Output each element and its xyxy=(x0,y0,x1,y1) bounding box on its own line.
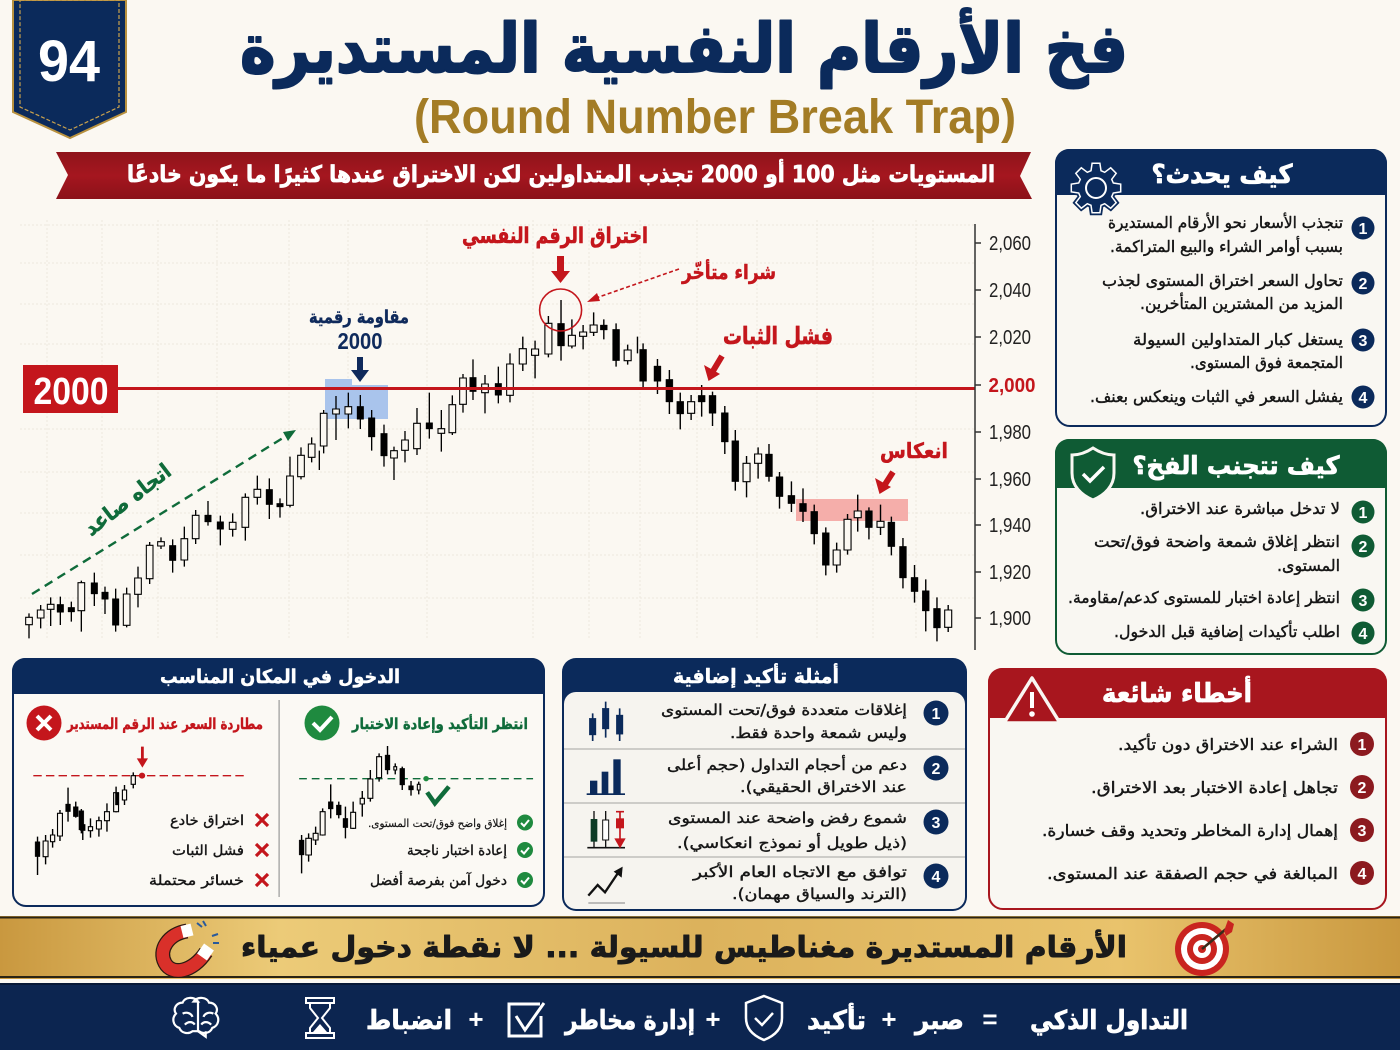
heading: أخطاء شائعة xyxy=(1102,676,1252,709)
panel: additional confirmation examples xyxy=(562,658,967,911)
price axis: 2,020 xyxy=(989,327,1031,349)
heading: أمثلة تأكيد إضافية xyxy=(673,662,839,688)
badge: number 94 xyxy=(13,0,126,138)
ribbon banner: المستويات مثل 100 أو 2000 تجذب المتداولين لكن الاختراق عندها كثيرًا ما يكون خادعًا xyxy=(127,158,995,188)
icon: red x xyxy=(26,706,62,740)
number badges xyxy=(1352,216,1374,408)
text: confirmation: تأكيد xyxy=(807,1003,866,1036)
number badges: 4 xyxy=(1359,390,1368,407)
heading: الدخول في المكان المناسب xyxy=(160,666,400,688)
header xyxy=(988,668,1387,718)
price axis: 1,960 xyxy=(989,469,1031,491)
arrow: reversal xyxy=(875,472,893,494)
label: psychological number breakout: اختراق الرقم النفسي xyxy=(462,224,648,249)
number badges xyxy=(1352,500,1374,644)
number badges xyxy=(1350,732,1374,885)
number badges: 1 xyxy=(1359,505,1368,522)
title: فخ الأرقام النفسية المستديرة xyxy=(240,7,1128,89)
arrow: to breakout xyxy=(551,256,570,283)
number badges: 3 xyxy=(1359,593,1368,610)
heading: chasing price: مطاردة السعر عند الرقم المستدير xyxy=(66,715,263,733)
text block xyxy=(661,701,907,903)
body xyxy=(564,692,965,909)
price axis: 1,900 xyxy=(989,608,1031,630)
text block: المتجمعة فوق المستوى. xyxy=(1190,353,1343,373)
number badges: 4 xyxy=(1358,866,1367,883)
header xyxy=(1055,149,1387,195)
footer: smart trading equation xyxy=(0,984,1400,1050)
panel: how to avoid the trap xyxy=(1055,439,1387,654)
number badges: 3 xyxy=(932,815,941,832)
text block: اطلب تأكيدات إضافية قبل الدخول. xyxy=(1114,620,1340,642)
panel: common mistakes xyxy=(988,668,1387,909)
mini chart: confirmation xyxy=(299,746,533,873)
checklist icons xyxy=(517,814,533,888)
label: numeric resistance xyxy=(309,307,409,354)
number badges: 1 xyxy=(932,706,941,723)
icon: warning xyxy=(1004,678,1060,723)
text block: المستوى. xyxy=(1277,556,1340,576)
checklist text: إعادة اختبار ناجحة xyxy=(407,843,507,859)
text block: تحاول السعر اختراق المستوى لجذب xyxy=(1102,271,1343,291)
heading: كيف يحدث؟ xyxy=(1152,160,1293,190)
icon: shield check xyxy=(1072,448,1114,500)
text: discipline: انضباط xyxy=(366,1006,452,1036)
label: 2000 box: 2000 xyxy=(34,371,108,413)
text block: توافق مع الاتجاه العام الأكبر xyxy=(692,862,907,881)
header xyxy=(12,658,545,694)
price axis: 2,040 xyxy=(989,280,1031,302)
icon: checkbox xyxy=(509,1003,544,1036)
arrow: to resistance xyxy=(351,357,369,382)
x-list text xyxy=(149,813,244,889)
text block: إهمال إدارة المخاطر وتحديد وقف خسارة. xyxy=(1042,821,1338,841)
panel: how it happens xyxy=(1055,149,1387,426)
text block: لا تدخل مباشرة عند الاختراق. xyxy=(1140,499,1340,519)
text: smart trading: التداول الذكي xyxy=(1030,1006,1188,1036)
text block: دعم من أحجام التداول (حجم أعلى xyxy=(667,755,907,774)
text block: عند الاختراق الحقيقي). xyxy=(740,778,907,797)
number badges: 4 xyxy=(932,869,941,886)
text: الأرقام المستديرة مغناطيس للسيولة ... لا نقطة دخول عمياء xyxy=(241,929,1127,964)
x-list text: اختراق خادع xyxy=(170,813,244,829)
text: risk management: إدارة مخاطر xyxy=(563,1006,695,1036)
arrow: uptrend dashed xyxy=(32,430,296,594)
text: plus: + xyxy=(705,1004,721,1034)
price axis: 1,920 xyxy=(989,562,1031,584)
line: 2000 level xyxy=(117,387,975,390)
icon: green check xyxy=(304,706,340,740)
checklist text: إغلاق واضح فوق/تحت المستوى. xyxy=(368,817,507,830)
heading: كيف تتجنب الفخ؟ xyxy=(1132,451,1340,481)
text block: المزيد من المشترين المتأخرين. xyxy=(1140,292,1343,314)
icon: target xyxy=(1175,920,1234,976)
label: uptrend: اتجاه صاعد xyxy=(79,459,176,541)
x-list text: فشل الثبات xyxy=(172,843,244,859)
icons xyxy=(587,702,626,903)
ribbon banner xyxy=(56,152,1032,199)
number badges: 2 xyxy=(1359,276,1368,293)
price axis: 2,000 xyxy=(988,375,1036,397)
text block: (الترند والسياق مهمان). xyxy=(732,885,907,903)
label: reversal: انعكاس xyxy=(880,439,948,463)
price axis: 2,060 xyxy=(989,233,1031,255)
number badges: 2 xyxy=(1359,539,1368,556)
mini chart: chasing xyxy=(33,747,247,875)
text: plus: + xyxy=(881,1004,897,1034)
icon: trend arrow xyxy=(588,867,625,903)
text block: (ذيل طويل أو نموذج انعكاسي). xyxy=(677,833,907,853)
sub-panel: left column xyxy=(26,706,268,889)
candles: second half xyxy=(519,300,952,641)
text block: يفشل السعر في الثبات وينعكس بعنف. xyxy=(1090,387,1343,407)
icon: shield xyxy=(746,996,782,1040)
text block: انتظر إغلاق شمعة واضحة فوق/تحت xyxy=(1094,532,1340,552)
x-list text: خسائر محتملة xyxy=(149,873,244,889)
number badges: 2 xyxy=(1358,780,1367,797)
text block xyxy=(1068,499,1340,642)
subtitle: (Round Number Break Trap) xyxy=(414,91,1016,144)
heading: wait for confirmation: انتظر التأكيد وإعادة الاختبار xyxy=(351,714,528,733)
badge: number 94: 94 xyxy=(38,29,100,94)
text block: انتظر إعادة اختبار للمستوى كدعم/مقاومة. xyxy=(1068,588,1340,608)
icon: candles xyxy=(589,702,623,741)
text: equals: = xyxy=(982,1004,998,1034)
text block: بسبب أوامر الشراء والبيع المتراكمة. xyxy=(1110,236,1343,257)
label: numeric resistance: مقاومة رقمية xyxy=(309,307,409,328)
number badges: 1 xyxy=(1359,221,1368,238)
checklist text: دخول آمن بفرصة أفضل xyxy=(370,871,507,889)
number badges: 2 xyxy=(932,761,941,778)
panel: entering at the right place xyxy=(12,658,545,906)
label: numeric resistance: 2000 xyxy=(338,328,382,354)
price axis: 1,980 xyxy=(989,422,1031,444)
label: late buying: شراء متأخّر xyxy=(681,258,776,284)
text block: وليس شمعة واحدة فقط. xyxy=(730,724,907,742)
marker: breakout circle xyxy=(540,289,582,331)
icon: gear xyxy=(1071,163,1121,213)
text: patience: صبر xyxy=(913,1006,964,1036)
banner: gold takeaway xyxy=(0,916,1400,979)
candles: first half xyxy=(26,353,513,638)
icon: magnet xyxy=(163,921,219,971)
price axis xyxy=(975,224,1036,650)
text block xyxy=(1090,212,1343,407)
text block: شموع رفض واضحة عند المستوى xyxy=(668,809,907,827)
text: plus: + xyxy=(468,1004,484,1034)
sub-panel: right column xyxy=(299,706,533,889)
icon: rejection candles xyxy=(587,811,626,848)
text block: إغلاقات متعددة فوق/تحت المستوى xyxy=(661,701,907,719)
text block: المبالغة في حجم الصفقة عند المستوى. xyxy=(1047,864,1338,884)
number badges: 4 xyxy=(1359,626,1368,643)
x-list icons xyxy=(256,814,268,886)
price axis: 1,940 xyxy=(989,515,1031,537)
zone: pink reversal zone xyxy=(796,499,908,521)
icon: brain xyxy=(173,998,218,1037)
label: failure to hold: فشل الثبات xyxy=(723,322,833,350)
zone: blue resistance zone xyxy=(325,379,388,419)
number badges: 1 xyxy=(1358,737,1367,754)
text block: يستغل كبار المتداولين السيولة xyxy=(1133,330,1343,350)
icon: hourglass xyxy=(306,998,334,1038)
text block: الشراء عند الاختراق دون تأكيد. xyxy=(1118,733,1338,755)
number badges: 3 xyxy=(1358,823,1367,840)
text block xyxy=(1042,733,1338,884)
arrow: late buying dashed xyxy=(587,269,679,302)
text block: تنجذب الأسعار نحو الأرقام المستديرة xyxy=(1108,212,1343,233)
text block: تجاهل إعادة الاختبار بعد الاختراق. xyxy=(1091,778,1338,798)
chart: candlestick price chart xyxy=(20,220,1036,650)
arrow: failure to hold xyxy=(704,356,722,381)
checklist text xyxy=(368,817,507,889)
icon: volume bars xyxy=(587,759,625,795)
number badges: 3 xyxy=(1359,333,1368,350)
header xyxy=(1055,439,1387,488)
number badges xyxy=(924,700,948,888)
